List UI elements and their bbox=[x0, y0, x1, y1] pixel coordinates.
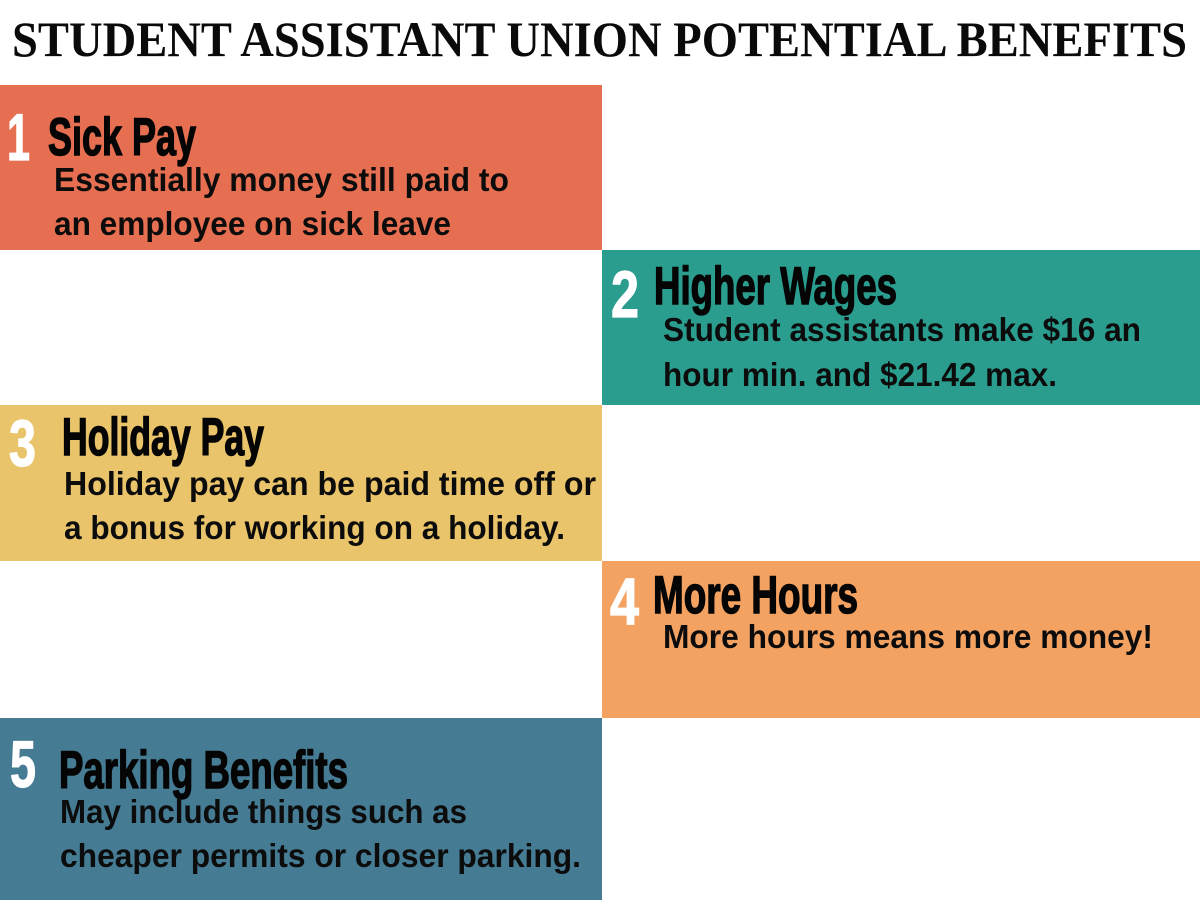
text: sick pay description: Essentially money still paid to bbox=[54, 161, 509, 198]
number 5: 5 bbox=[10, 727, 36, 801]
text: sick pay description bbox=[54, 161, 509, 242]
panel: higher wages bbox=[602, 250, 1200, 405]
text: holiday pay description: Holiday pay can be paid time off or bbox=[64, 465, 596, 502]
panel: more hours bbox=[602, 561, 1200, 718]
panel: parking benefits bbox=[0, 718, 602, 900]
text: higher wages description bbox=[663, 311, 1141, 393]
text: parking benefits description bbox=[60, 793, 581, 874]
heading: higher wages: Higher Wages bbox=[654, 257, 897, 316]
panel: holiday pay bbox=[0, 405, 602, 561]
text: parking benefits description: cheaper permits or closer parking. bbox=[60, 837, 581, 874]
number 4: 4 bbox=[610, 564, 639, 638]
number 2: 2 bbox=[611, 257, 639, 331]
number 3: 3 bbox=[9, 406, 36, 480]
panel: sick pay bbox=[0, 85, 602, 250]
heading: holiday pay: Holiday Pay bbox=[62, 408, 264, 467]
text: higher wages description: Student assistants make $16 an bbox=[663, 311, 1141, 348]
text: parking benefits description: May include things such as bbox=[60, 793, 467, 830]
heading: more hours: More Hours bbox=[653, 566, 858, 625]
text: holiday pay description: a bonus for working on a holiday. bbox=[64, 509, 565, 546]
text: higher wages description: hour min. and $21.42 max. bbox=[663, 356, 1057, 393]
text: more hours description: More hours means more money! bbox=[663, 618, 1153, 655]
heading: parking benefits: Parking Benefits bbox=[59, 741, 348, 800]
number 1: 1 bbox=[7, 100, 30, 174]
heading: sick pay: Sick Pay bbox=[48, 108, 196, 167]
text: sick pay description: an employee on sick leave bbox=[54, 205, 451, 242]
text: holiday pay description bbox=[64, 465, 596, 546]
